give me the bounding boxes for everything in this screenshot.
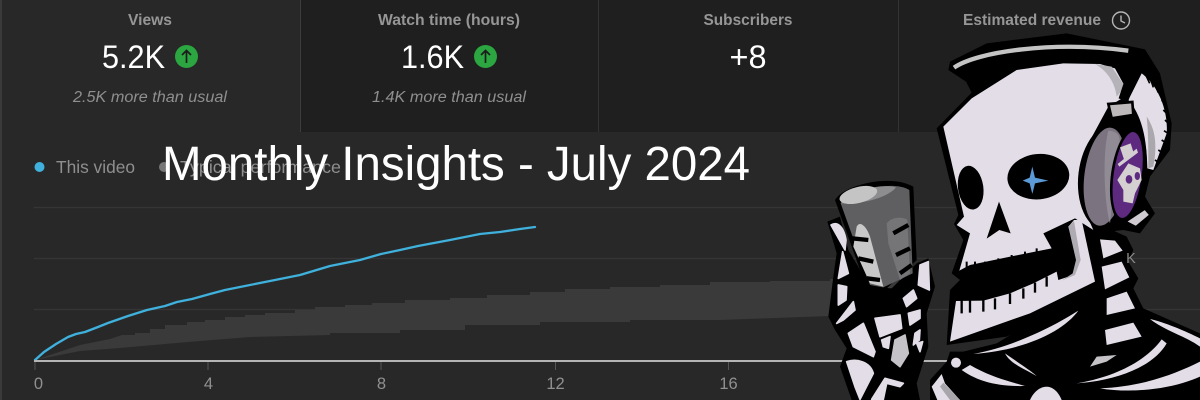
panel: watch time bbox=[372, 12, 527, 106]
skull bbox=[943, 63, 1125, 271]
x axis labels: 16 bbox=[719, 375, 738, 393]
skull shading bbox=[1095, 64, 1125, 97]
panel: views bbox=[72, 12, 228, 106]
panel: watch time: Watch time (hours) bbox=[378, 12, 520, 29]
panel: subscribers bbox=[704, 12, 793, 75]
this video line bbox=[35, 227, 535, 360]
ribcage and collarbones bbox=[932, 311, 1200, 400]
x axis labels: 8 bbox=[377, 375, 386, 393]
panel: estimated revenue: Estimated revenue bbox=[963, 12, 1101, 29]
jaw bbox=[950, 220, 1095, 342]
panel: views: 5.2K bbox=[102, 39, 165, 75]
head silhouette bbox=[937, 33, 1172, 345]
lower teeth bbox=[962, 277, 1047, 313]
panel: subscribers: Subscribers bbox=[704, 12, 793, 29]
typical performance band bbox=[35, 279, 910, 360]
title: Monthly Insights - July 2024 bbox=[162, 138, 750, 191]
icon: views up arrow bbox=[175, 45, 198, 68]
nose bbox=[987, 202, 1011, 239]
hand silhouette bbox=[827, 217, 935, 400]
upper teeth bbox=[967, 248, 1037, 272]
headphone skull logo bbox=[1117, 143, 1142, 203]
headphone cup bbox=[1072, 102, 1152, 235]
chart axis label overlapping the neck: K bbox=[1126, 251, 1136, 267]
chart legend bbox=[34, 157, 341, 177]
panel: views: 2.5K more than usual bbox=[72, 89, 228, 106]
x axis labels: 4 bbox=[204, 375, 213, 393]
neck vertebrae bbox=[1090, 239, 1142, 367]
skull back with hatching bbox=[1128, 73, 1168, 170]
finger bones bbox=[831, 224, 929, 399]
x axis labels: 0 bbox=[34, 375, 43, 393]
icon: watch time up arrow bbox=[474, 45, 497, 68]
eye star bbox=[1023, 167, 1048, 194]
chart legend: Typical performance bbox=[180, 157, 341, 177]
chart legend: This video bbox=[56, 157, 135, 177]
panel: subscribers: +8 bbox=[730, 39, 766, 75]
panel: views: Views bbox=[128, 12, 172, 29]
x axis bbox=[34, 360, 1200, 362]
panel: watch time: 1.6K bbox=[401, 39, 464, 75]
microphone bbox=[835, 181, 917, 292]
x axis labels bbox=[34, 375, 738, 393]
icon: clock bbox=[1112, 12, 1130, 29]
right eye bbox=[1005, 151, 1072, 202]
illustration: skeleton podcaster bbox=[827, 33, 1200, 400]
headband strap bbox=[1123, 55, 1138, 100]
headband bbox=[954, 47, 1128, 68]
body silhouette bbox=[930, 220, 1200, 400]
left eye bbox=[955, 164, 986, 211]
x axis labels: 12 bbox=[546, 375, 565, 393]
panel: watch time: 1.4K more than usual bbox=[372, 89, 527, 106]
line chart bbox=[34, 208, 1200, 393]
